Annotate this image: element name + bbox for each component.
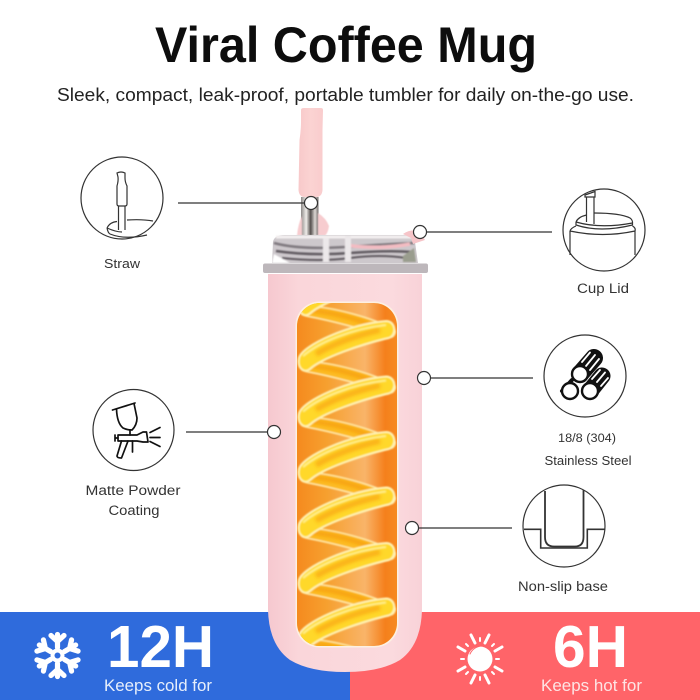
subtitle: Sleek, compact, leak-proof, portable tumbler for daily on-the-go use. xyxy=(57,84,634,105)
cutaway window xyxy=(296,302,398,648)
hot hours value: 6H xyxy=(553,614,628,680)
panel: hot retention band xyxy=(350,612,700,700)
straw leader line xyxy=(178,196,318,210)
title: Viral Coffee Mug xyxy=(155,17,537,73)
icon: non-slip base xyxy=(523,485,605,567)
steel label: 18/8 (304) xyxy=(558,433,616,445)
steel leader line xyxy=(418,372,533,384)
icon: spray gun xyxy=(93,390,174,470)
non-slip label: Non-slip base xyxy=(518,579,608,594)
lid tab xyxy=(403,230,425,244)
cup lid label: Cup Lid xyxy=(577,281,629,296)
base leader line xyxy=(406,522,512,534)
lid xyxy=(272,230,425,263)
tumbler illustration xyxy=(263,108,428,672)
lid collar xyxy=(263,264,428,273)
steel label line 2: Stainless Steel xyxy=(544,454,632,468)
cold hours value: 12H xyxy=(107,614,214,680)
matte coating label line 2: Coating xyxy=(108,503,160,518)
straw label: Straw xyxy=(104,257,141,271)
straw metal section xyxy=(301,197,318,239)
lower right pipe xyxy=(590,370,608,391)
icon: cup lid xyxy=(563,189,645,271)
spiral coil turns xyxy=(297,303,397,646)
straw silicone tip xyxy=(298,108,323,197)
matte coating label: Matte Powder xyxy=(86,483,181,498)
hot caption: Keeps hot for xyxy=(541,677,643,695)
panel: cold retention band xyxy=(0,612,350,700)
straw grommet xyxy=(297,213,329,238)
icon: steel pipes xyxy=(544,335,626,417)
tumbler body xyxy=(268,274,422,672)
lid leader line xyxy=(414,226,552,238)
icon: snowflake xyxy=(36,634,79,676)
cold caption: Keeps cold for xyxy=(104,677,213,695)
icon: straw xyxy=(81,157,163,239)
spray gun leader line xyxy=(186,426,280,438)
top pipe xyxy=(580,352,599,374)
icon: sun xyxy=(458,635,502,683)
